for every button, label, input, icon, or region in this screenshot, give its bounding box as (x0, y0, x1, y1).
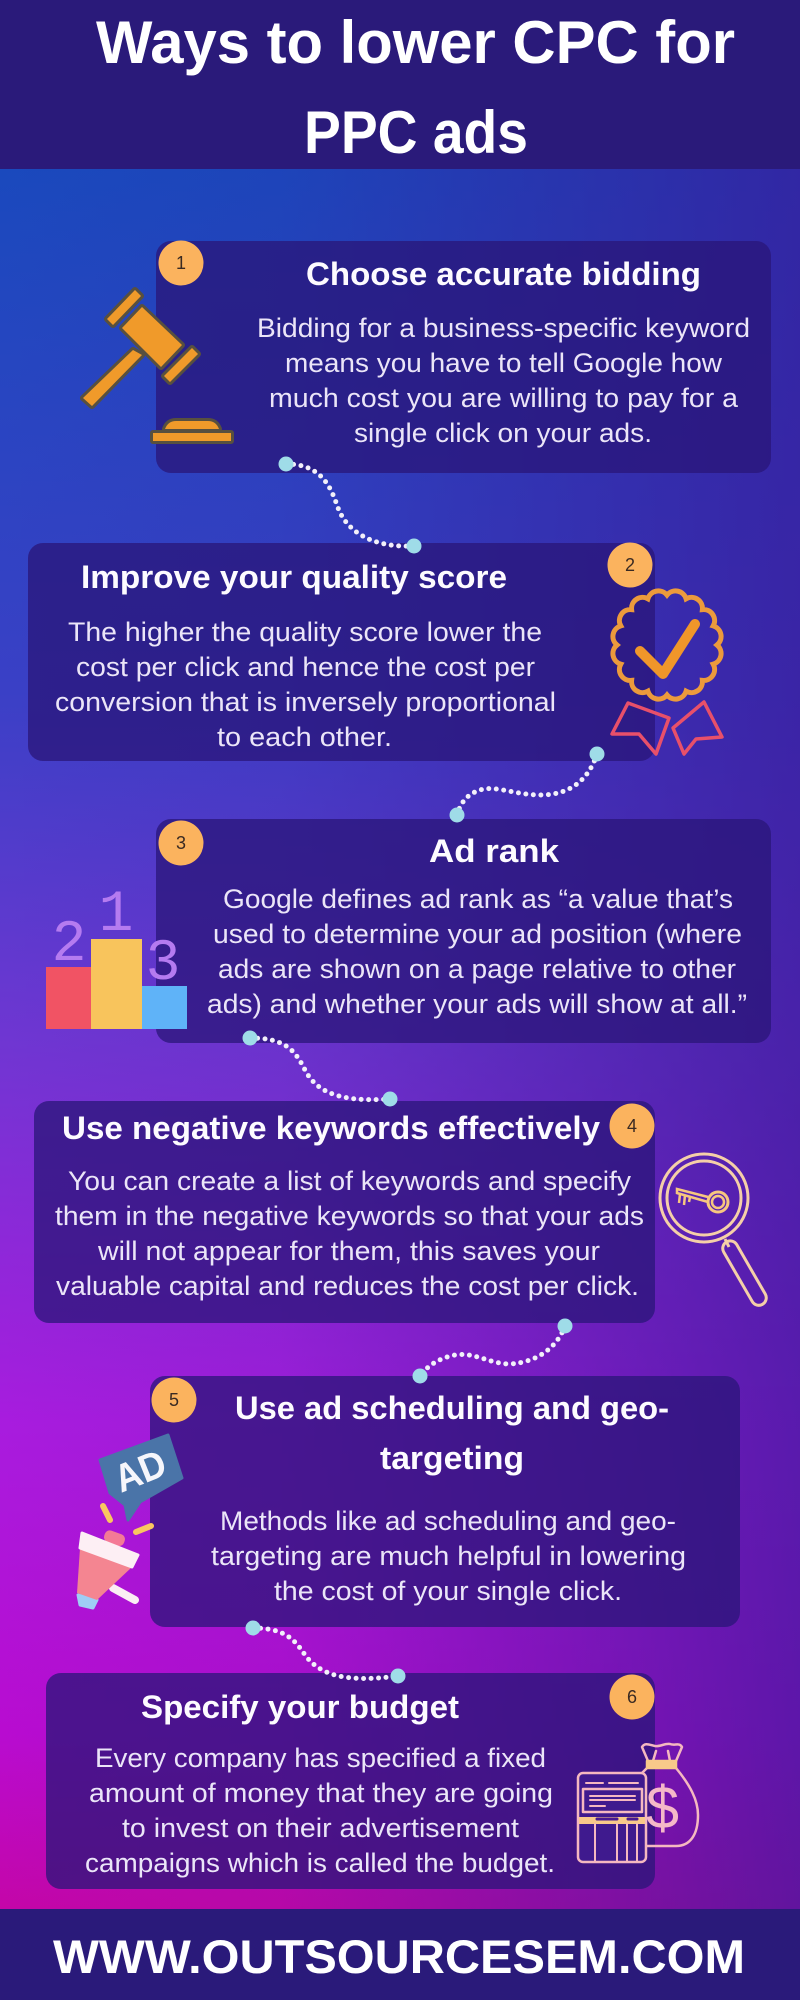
connector: step 1 to 2 (278, 456, 422, 554)
number badge 2 (608, 542, 652, 588)
number badge 1: 1 (176, 253, 186, 273)
number badge 3 (158, 820, 204, 866)
panel: specify your budget (46, 1673, 655, 1889)
icon: megaphone with AD bubble: AD (108, 1442, 173, 1501)
text block: ad rank description: ads are shown on a page relative to other (218, 954, 736, 984)
text block: quality score description: conversion that is inversely proportional (55, 687, 556, 717)
text block: ad scheduling description (211, 1506, 686, 1606)
text block: bidding description: Bidding for a business-specific keyword (257, 313, 750, 343)
text block: ad rank description: ads) and whether your ads will show at all.” (207, 989, 747, 1019)
text block: negative keywords description: valuable capital and reduces the cost per click. (56, 1271, 639, 1301)
icon: quality rosette with check (612, 591, 722, 754)
panel: ad rank (156, 819, 771, 1043)
text block: quality score description: to each other. (217, 722, 392, 752)
heading: use ad scheduling and geo-targeting: targeting (380, 1440, 524, 1476)
text block: bidding description: much cost you are willing to pay for a (269, 383, 739, 413)
footer band with website (0, 1909, 800, 2000)
panel: use negative keywords effectively (34, 1101, 655, 1323)
connector: step 3 to 4 (242, 1030, 398, 1106)
text block: ad scheduling description: the cost of your single click. (274, 1576, 622, 1606)
number badge 4: 4 (627, 1116, 637, 1136)
connector: step 2 to 3 (450, 746, 604, 822)
number badge 5: 5 (169, 1390, 179, 1410)
text block: ad rank description: Google defines ad rank as “a value that’s (223, 884, 733, 914)
text block: ad rank description (207, 884, 747, 1019)
number badge 6: 6 (627, 1687, 637, 1707)
text block: negative keywords description (55, 1166, 644, 1301)
icon: ranking podium: 2 (52, 913, 86, 978)
text block: ad rank description: used to determine your ad position (where (213, 919, 742, 949)
heading: use ad scheduling and geo-targeting (235, 1390, 669, 1476)
heading: choose accurate bidding: Choose accurate bidding (306, 256, 701, 292)
icon: ranking podium (46, 883, 187, 1029)
text block: quality score description: The higher the quality score lower the (68, 617, 542, 647)
number badge 1 (158, 240, 204, 286)
heading: use negative keywords effectively: Use negative keywords effectively (62, 1110, 600, 1146)
title: PPC ads (304, 99, 528, 166)
icon: gavel (83, 290, 231, 441)
text block: ad scheduling description: targeting are much helpful in lowering (211, 1541, 686, 1571)
panel: improve your quality score (28, 543, 655, 761)
heading: improve your quality score: Improve your quality score (81, 559, 507, 595)
icon: budget machine and money bag (578, 1744, 698, 1862)
text block: bidding description (257, 313, 750, 448)
number badge 4 (610, 1104, 654, 1148)
icon: magnifier with key (660, 1154, 769, 1308)
text block: budget description: amount of money that they are going (89, 1778, 553, 1808)
website url: WWW.OUTSOURCESEM.COM (53, 1930, 745, 1983)
title: Ways to lower CPC for (96, 9, 735, 76)
text block: ad scheduling description: Methods like ad scheduling and geo- (220, 1506, 676, 1536)
connector: step 5 to 6 (246, 1620, 406, 1684)
title (96, 9, 735, 166)
number badge 6 (610, 1674, 654, 1720)
icon: budget machine and money bag: $ (646, 1774, 679, 1841)
number badge 5 (152, 1378, 196, 1422)
text block: bidding description: single click on your ads. (354, 418, 652, 448)
panel: choose accurate bidding (156, 241, 771, 473)
icon: ranking podium: 3 (146, 932, 180, 997)
text block: quality score description (55, 617, 556, 752)
icon: ranking podium: 1 (99, 883, 133, 948)
icon: megaphone with AD bubble (77, 1435, 182, 1608)
text block: quality score description: cost per click and hence the cost per (76, 652, 535, 682)
heading: use ad scheduling and geo-targeting: Use ad scheduling and geo- (235, 1390, 669, 1426)
text block: budget description: to invest on their advertisement (122, 1813, 520, 1843)
text block: negative keywords description: You can create a list of keywords and specify (68, 1166, 632, 1196)
heading: specify your budget: Specify your budget (141, 1689, 459, 1725)
number badge 3: 3 (176, 833, 186, 853)
panel: ad scheduling and geo-targeting (150, 1376, 740, 1627)
text block: negative keywords description: will not appear for them, this saves your (97, 1236, 600, 1266)
header band with title (0, 0, 800, 169)
number badge 2: 2 (625, 555, 635, 575)
text block: budget description: campaigns which is called the budget. (85, 1848, 555, 1878)
connector: step 4 to 5 (412, 1318, 572, 1384)
text block: budget description: Every company has specified a fixed (95, 1743, 546, 1773)
heading: ad rank: Ad rank (429, 833, 559, 869)
text block: budget description (85, 1743, 555, 1878)
text block: bidding description: means you have to tell Google how (285, 348, 723, 378)
text block: negative keywords description: them in the negative keywords so that your ads (55, 1201, 644, 1231)
